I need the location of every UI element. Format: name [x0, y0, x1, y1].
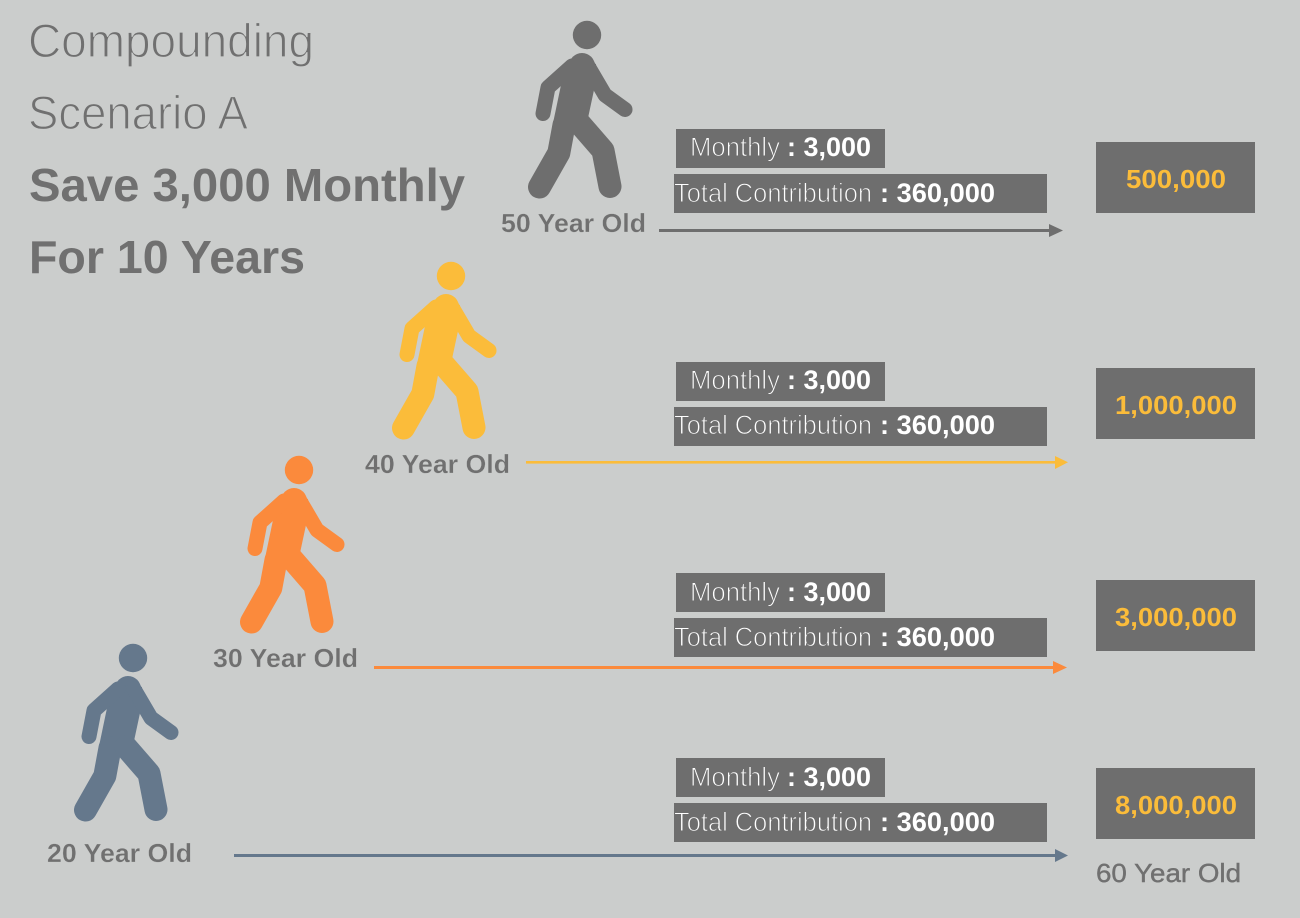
row: 50 year old	[501, 21, 1255, 238]
label: 30 year old: 30 Year Old	[213, 643, 358, 673]
row: 30 year old	[213, 456, 1255, 674]
title: For 10 Years	[29, 231, 305, 283]
arrow: 40 to 60	[526, 456, 1068, 469]
value box: 1,000,000	[1115, 390, 1237, 420]
label: 20 year old: 20 Year Old	[47, 838, 192, 868]
icon: walking person orange	[252, 456, 337, 622]
contribution box	[674, 618, 1047, 657]
title: Scenario A	[28, 86, 249, 139]
monthly box: : 3,000	[787, 577, 871, 607]
monthly box: Monthly	[690, 365, 780, 395]
label: 40 year old: 40 Year Old	[365, 449, 510, 479]
contribution box: : 360,000	[880, 807, 995, 837]
value box: 8,000,000	[1115, 790, 1237, 820]
row: 40 year old	[365, 262, 1255, 479]
monthly box	[676, 758, 885, 797]
icon: walking person grey	[540, 21, 625, 187]
monthly box	[676, 362, 885, 401]
row: 20 year old	[47, 644, 1255, 868]
monthly box: Monthly	[690, 132, 780, 162]
contribution box	[674, 407, 1047, 446]
contribution box: : 360,000	[880, 622, 995, 652]
contribution box: Total Contribution	[674, 807, 872, 837]
monthly box	[676, 573, 885, 612]
monthly box: Monthly	[690, 577, 780, 607]
value box	[1096, 142, 1255, 213]
arrow: 30 to 60	[374, 661, 1067, 674]
title	[28, 14, 465, 283]
label: 50 year old: 50 Year Old	[501, 208, 646, 238]
monthly box: : 3,000	[787, 762, 871, 792]
monthly box	[676, 129, 885, 168]
icon: walking person yellow	[404, 262, 489, 428]
value box	[1096, 580, 1255, 651]
contribution box: : 360,000	[880, 178, 995, 208]
value box	[1096, 368, 1255, 439]
label: 60 year old: 60 Year Old	[1096, 858, 1241, 888]
contribution box	[674, 803, 1047, 842]
title: Compounding	[28, 14, 314, 67]
arrow: 50 to 60	[659, 224, 1063, 237]
value box: 500,000	[1126, 164, 1226, 194]
title: Save 3,000 Monthly	[29, 159, 465, 211]
arrow: 20 to 60	[234, 849, 1068, 862]
contribution box: : 360,000	[880, 410, 995, 440]
contribution box	[674, 174, 1047, 213]
contribution box: Total Contribution	[674, 410, 872, 440]
monthly box: : 3,000	[787, 132, 871, 162]
contribution box: Total Contribution	[674, 178, 872, 208]
value box	[1096, 768, 1255, 839]
monthly box: : 3,000	[787, 365, 871, 395]
icon: walking person slate	[86, 644, 171, 810]
monthly box: Monthly	[690, 762, 780, 792]
contribution box: Total Contribution	[674, 622, 872, 652]
value box: 3,000,000	[1115, 602, 1237, 632]
